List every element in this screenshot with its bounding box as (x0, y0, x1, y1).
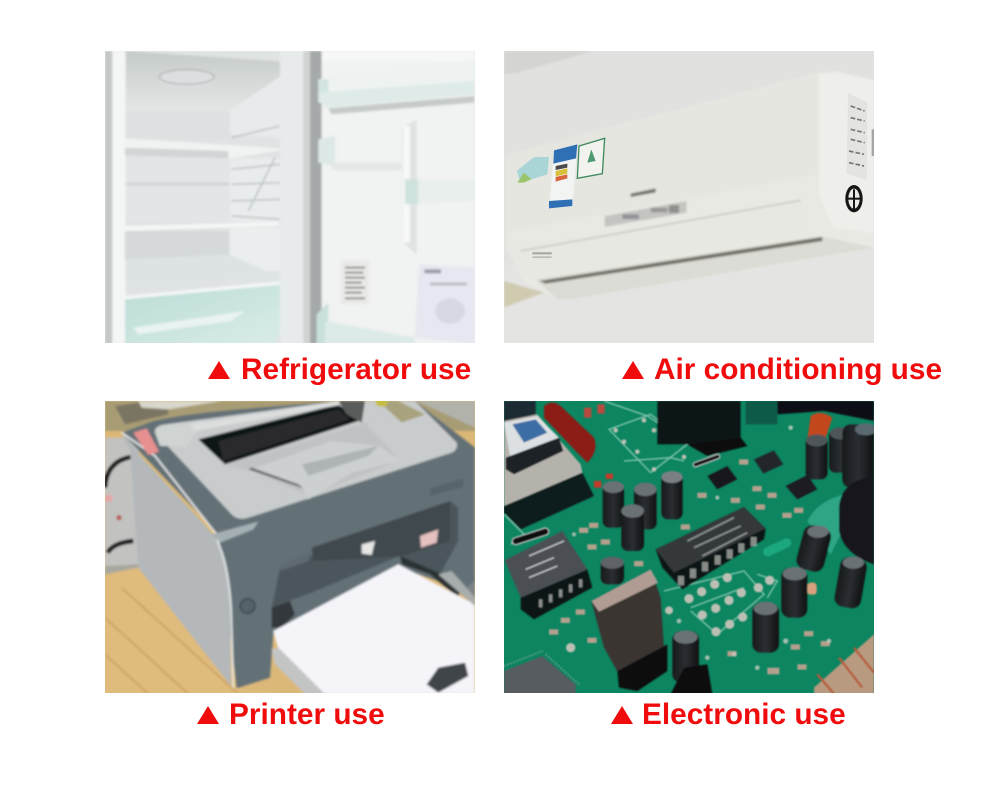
caption: air conditioning use: Air conditioning use (654, 353, 942, 386)
caption: printer use: Printer use (229, 698, 385, 731)
panel: refrigerator photo (105, 51, 475, 343)
caption: electronic use: Electronic use (642, 698, 846, 731)
panel: air conditioner photo (504, 51, 874, 343)
panel: circuit board photo (504, 401, 874, 693)
caption: refrigerator use: Refrigerator use (241, 353, 471, 386)
panel: printer photo (105, 401, 475, 693)
